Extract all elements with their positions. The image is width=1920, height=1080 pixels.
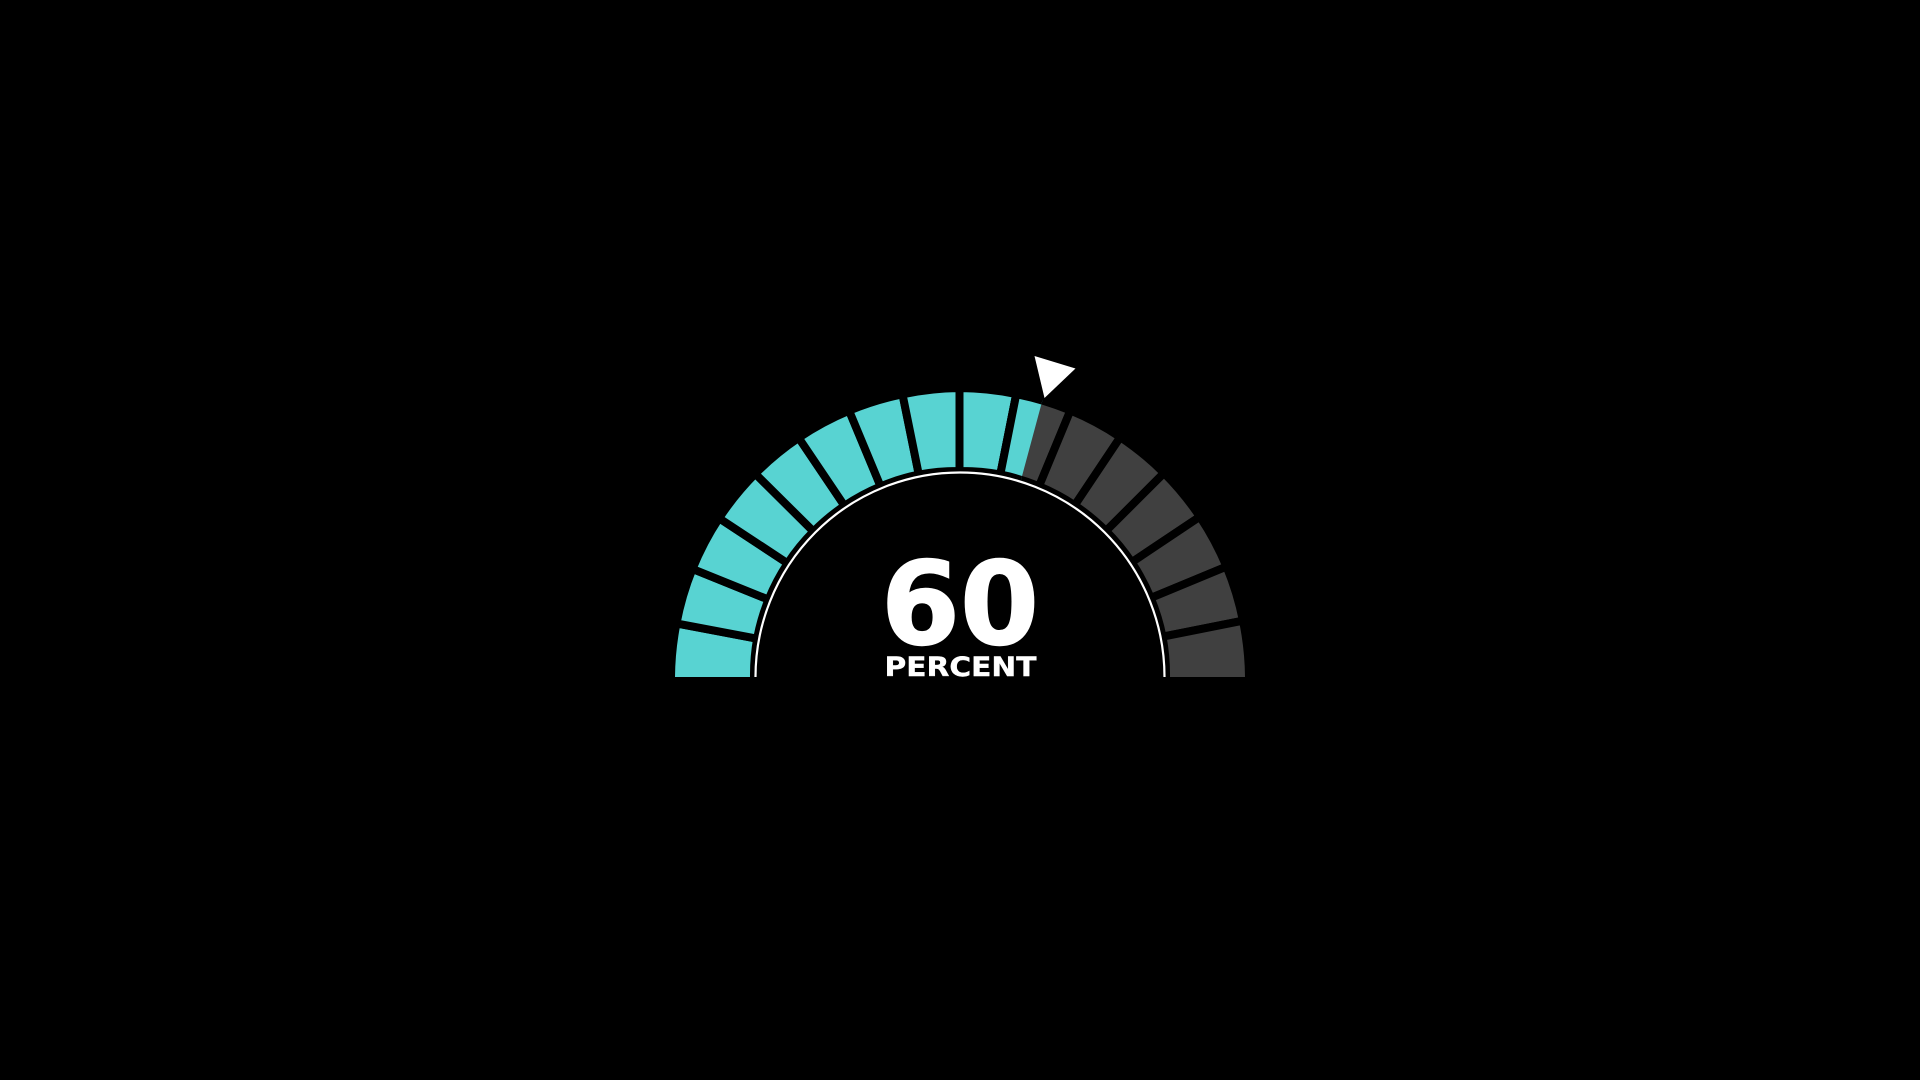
filled cyan segments [671,388,1016,681]
unfilled grey segments [1000,394,1249,681]
semicircular gauge [671,388,1249,681]
inner white arc [756,472,1164,677]
partially filled cyan segment [997,398,1042,480]
label: PERCENT: PERCENT [884,652,1037,683]
value: 60: 60 [881,538,1039,672]
pointer triangle [1034,356,1076,398]
